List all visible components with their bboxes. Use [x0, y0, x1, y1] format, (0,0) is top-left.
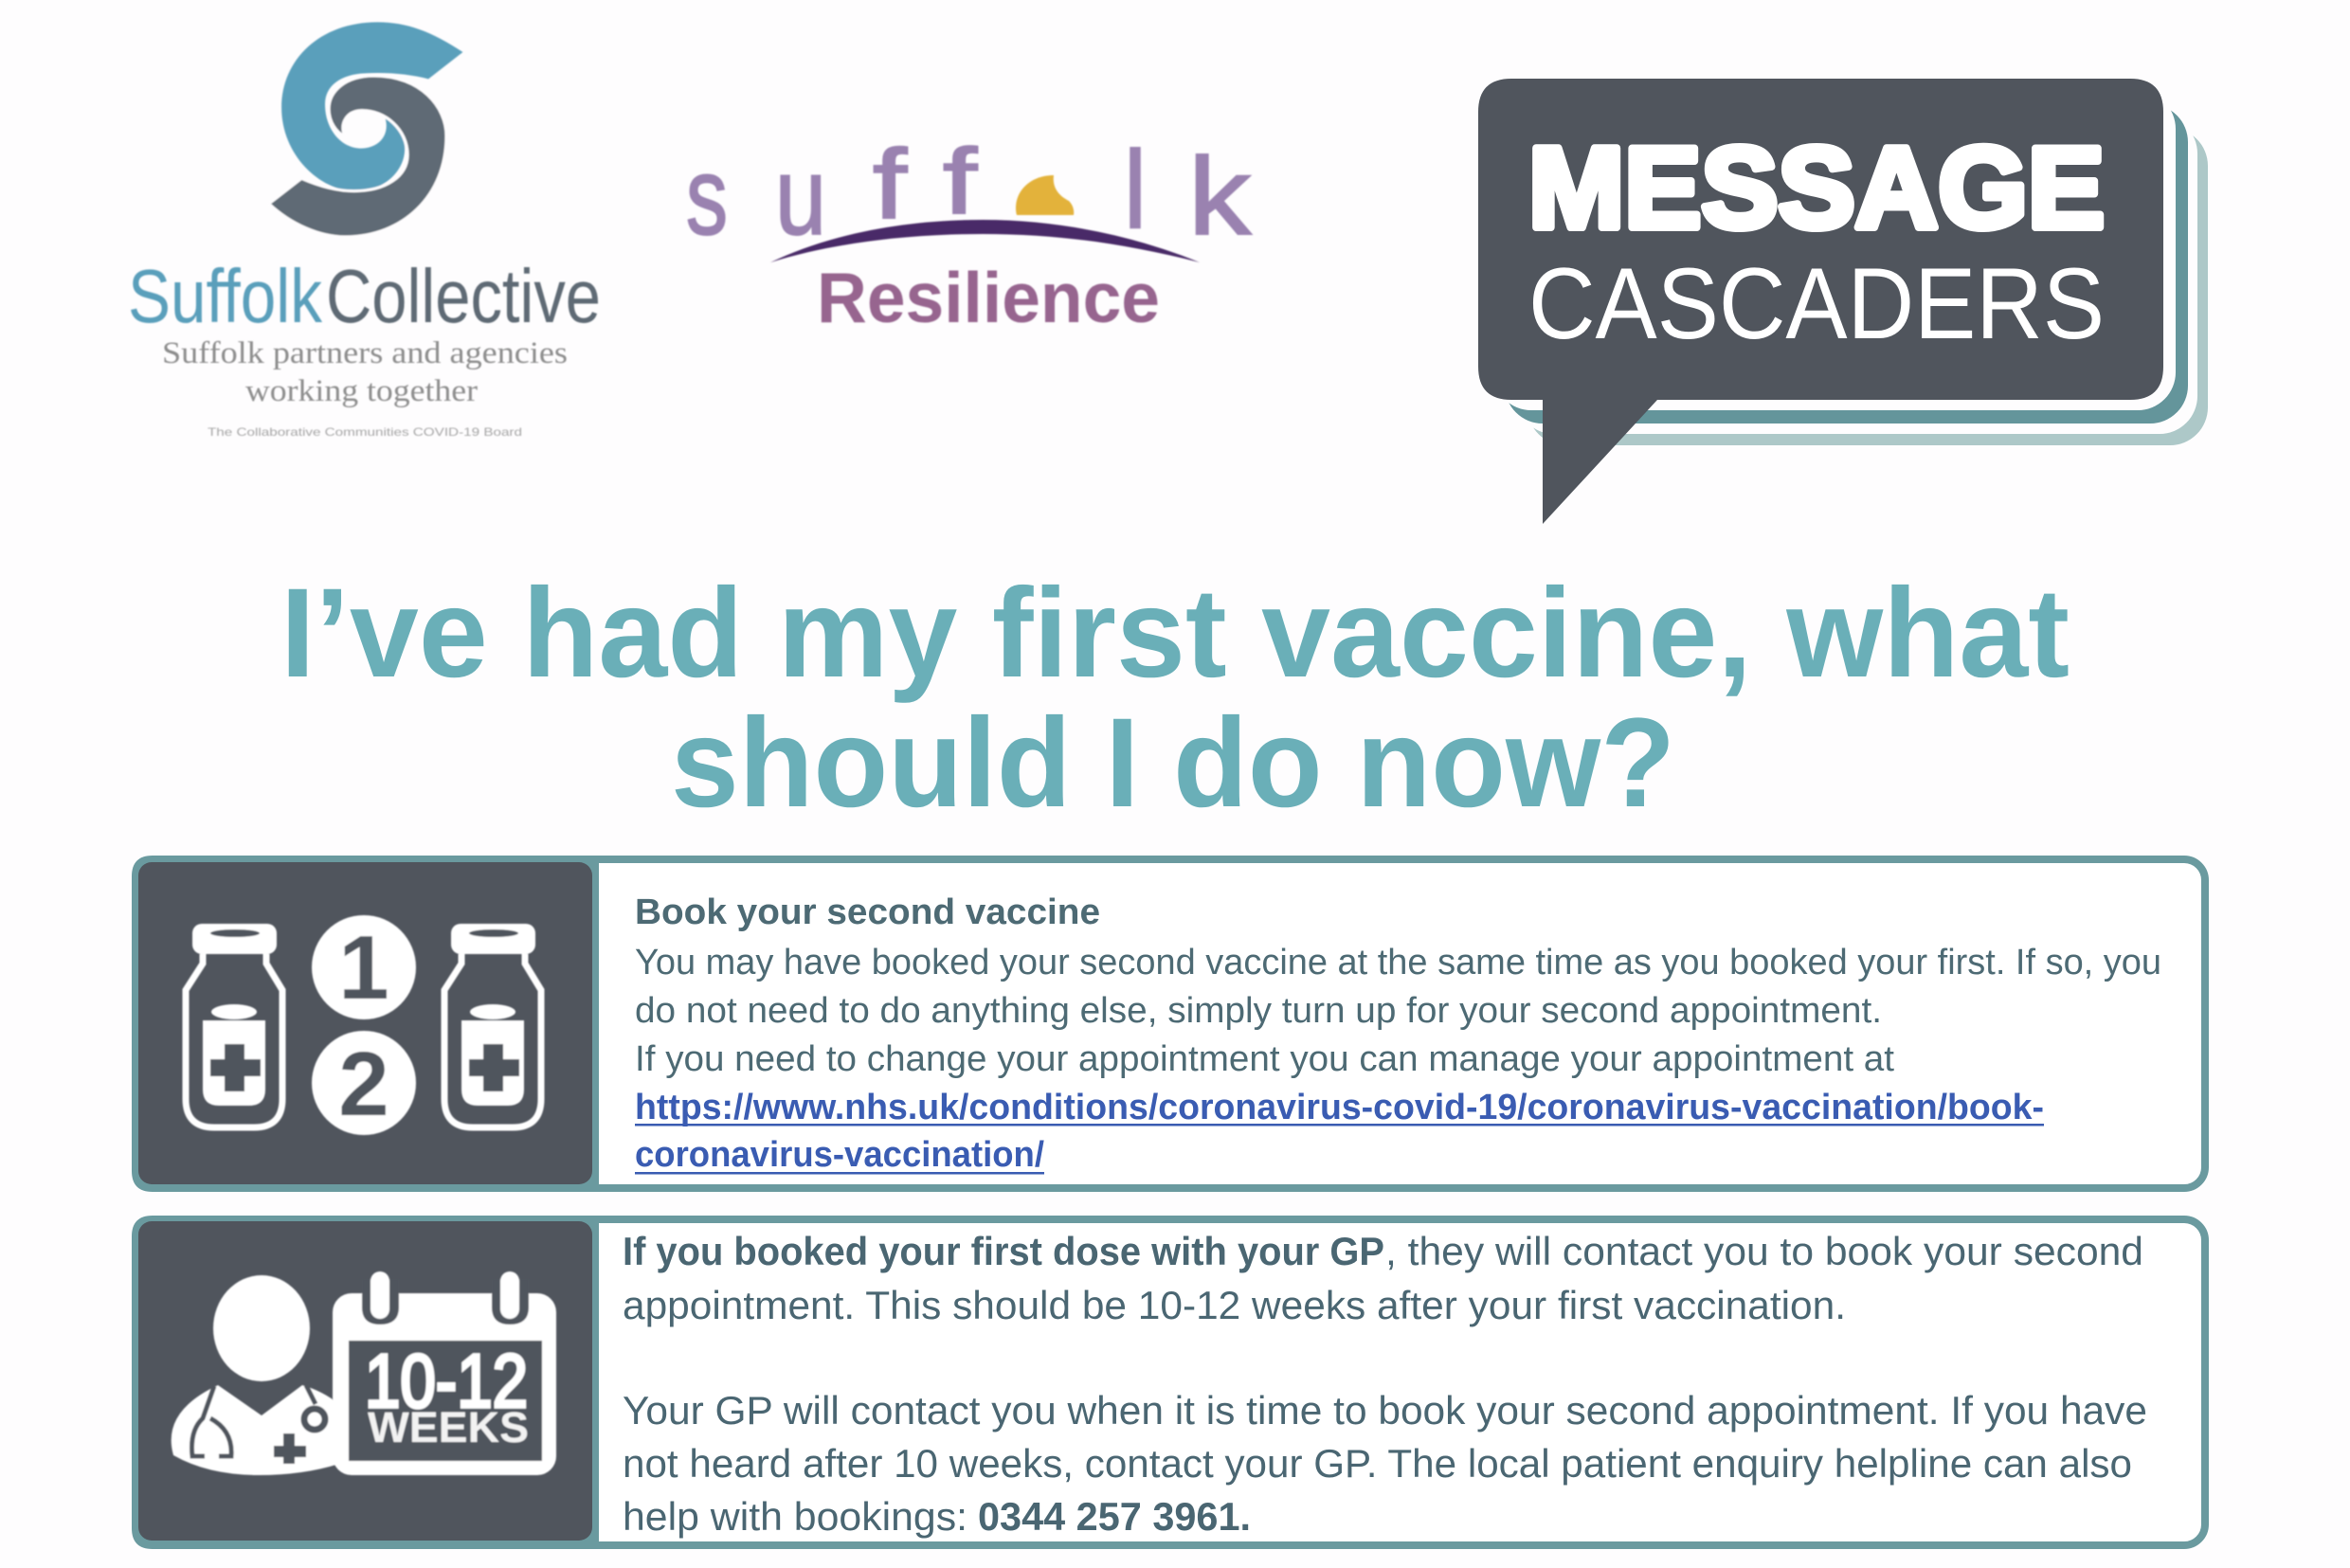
wordmark letters: suffolk: s [686, 135, 728, 258]
tagline: working together [245, 374, 478, 408]
icon: number 1: 1 [338, 917, 389, 1018]
title: I’ve had my first vaccine, what [280, 563, 2070, 704]
text block: GP booking: If you booked your first dose with your GP [623, 1229, 1384, 1273]
logo: Message Cascaders speech bubble [1478, 79, 2208, 524]
icon: vial left [186, 924, 282, 1127]
text block: second vaccine instructions: You may have booked your second vaccine at the same time as you booked your first. If so, you [635, 943, 2161, 982]
icon: number 2 [312, 1031, 416, 1135]
icon: calendar 10-12 weeks: 10-12 [365, 1339, 528, 1423]
text block: second vaccine instructions: If you need to change your appointment you can manage your appointment at [635, 1039, 1894, 1079]
icon: calendar 10-12 weeks [333, 1271, 556, 1475]
text block: GP booking: appointment. This should be 10-12 weeks after your first vaccination. [623, 1283, 1846, 1327]
panel: booked with your GP [132, 1216, 2205, 1549]
wordmark: Collective: Collective [326, 254, 601, 338]
icon: calendar 10-12 weeks: WEEKS [368, 1403, 529, 1451]
text block: helpline: 0344 257 3961. [978, 1494, 1251, 1539]
icon: vial right [444, 924, 541, 1127]
text: CASCADERS: CASCADERS [1528, 246, 2105, 360]
icon panel background [138, 1221, 592, 1541]
text: MESSAGE: MESSAGE [1528, 123, 2105, 252]
text block: GP booking: , they will contact you to book your second [1385, 1229, 2143, 1273]
wordmark letters: suffolk: f [943, 129, 978, 233]
text block: second vaccine instructions: do not need to do anything else, simply turn up for your second appointment. [635, 991, 1882, 1031]
icon: swirl [269, 22, 462, 237]
link: NHS booking page: coronavirus-vaccination/ [635, 1135, 1044, 1175]
text block: helpline: Your GP will contact you when it is time to book your second appointment. If you have [623, 1388, 2147, 1433]
logo: Suffolk Collective [128, 22, 601, 439]
icon: horizon arc [770, 220, 1200, 262]
title: should I do now? [671, 693, 1675, 834]
panel: book your second vaccine [132, 856, 2205, 1192]
text block: helpline: help with bookings: [623, 1494, 967, 1539]
title [280, 563, 2070, 834]
wordmark: Suffolk: Suffolk [128, 254, 323, 338]
icon: number 1 [312, 915, 416, 1019]
wordmark letters: suffolk: k [1188, 135, 1252, 258]
text block: second vaccine instructions [635, 943, 2161, 1079]
text block: helpline: not heard after 10 weeks, contact your GP. The local patient enquiry helpline can also [623, 1441, 2132, 1486]
wordmark letters: suffolk: l [1124, 128, 1147, 251]
text block: GP booking [623, 1229, 2143, 1327]
icon: doctor [172, 1275, 339, 1475]
wordmark: Resilience: Resilience [817, 258, 1160, 337]
wordmark letters: suffolk: f [873, 130, 908, 240]
icon panel background [138, 862, 592, 1184]
tagline [162, 336, 568, 408]
wordmark letters: suffolk: u [775, 135, 826, 258]
icon: number 2: 2 [338, 1034, 389, 1135]
heading: book your second vaccine: Book your second vaccine [635, 892, 1100, 932]
logo: Suffolk Resilience [686, 128, 1252, 337]
wordmark letters: suffolk [686, 128, 1252, 258]
link: NHS booking page [635, 1088, 2044, 1175]
link: NHS booking page: https://www.nhs.uk/conditions/coronavirus-covid-19/coronavirus-vaccination/book- [635, 1088, 2044, 1127]
small print: The Collaborative Communities COVID-19 Board [208, 425, 522, 439]
bubble body [1478, 79, 2163, 524]
icon: sun [1016, 175, 1074, 215]
tagline: Suffolk partners and agencies [162, 336, 568, 370]
text block: helpline [623, 1388, 2147, 1539]
